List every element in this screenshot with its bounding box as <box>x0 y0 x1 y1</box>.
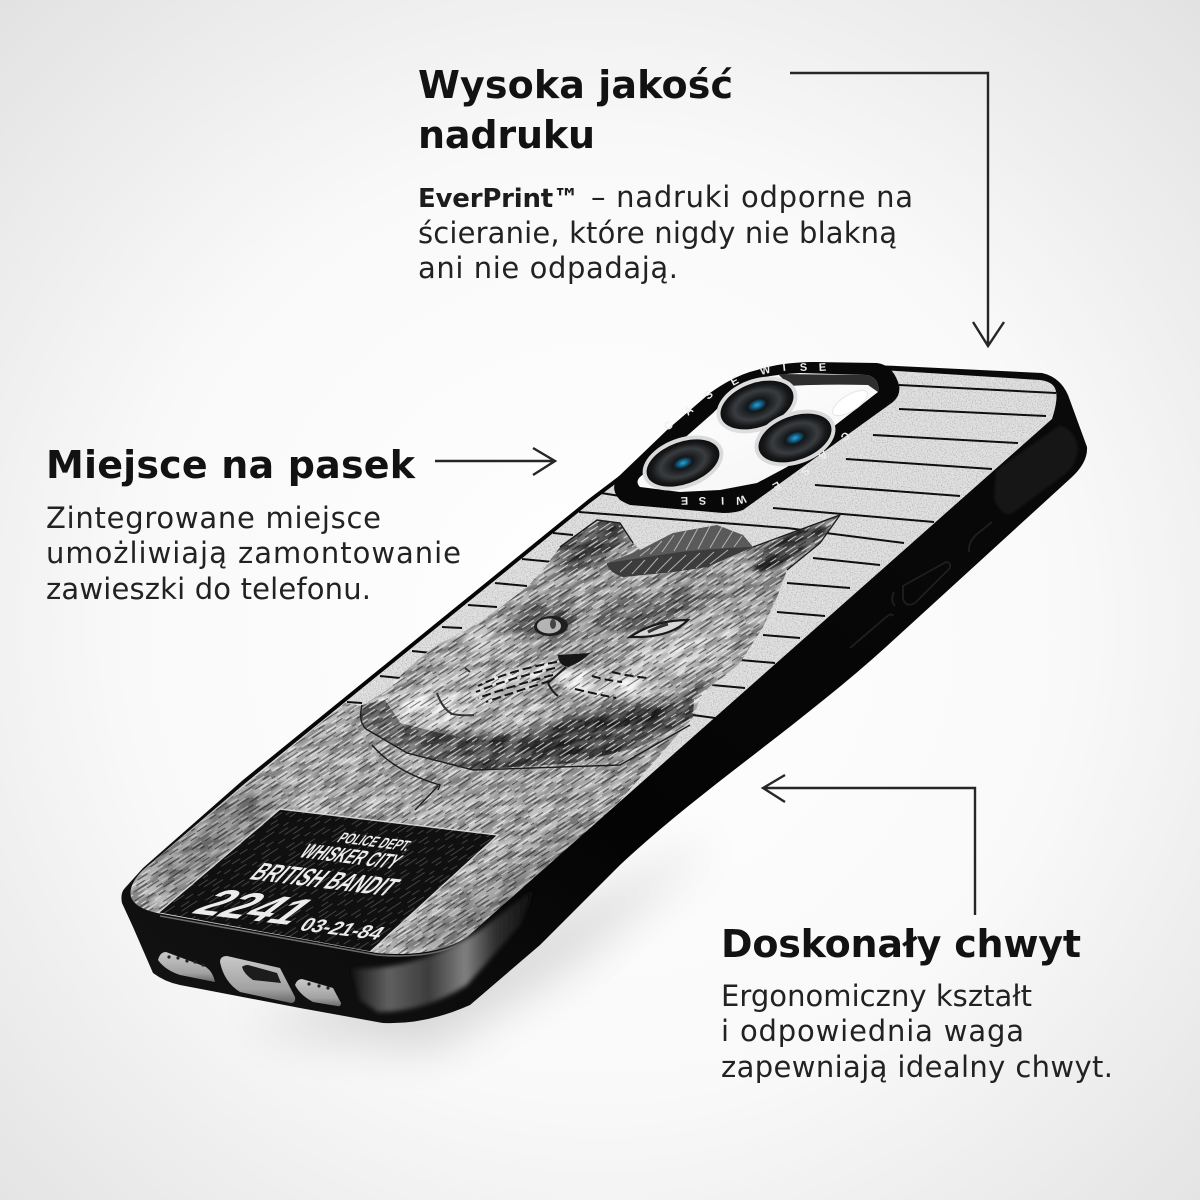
lens right <box>747 399 843 477</box>
speaker right <box>295 979 341 1006</box>
left eye <box>534 616 568 636</box>
plate board <box>158 809 498 952</box>
side bump <box>994 425 1078 515</box>
speaker left <box>158 952 215 982</box>
description: EverPrint™ <box>418 184 579 214</box>
ring lettering bottom: CASEWISE <box>681 429 852 507</box>
plate text: number: 2241 <box>179 882 328 933</box>
callout: print quality <box>418 63 913 285</box>
description: ani nie odpadają. <box>418 251 678 285</box>
description: Zintegrowane miejsce <box>46 501 381 535</box>
arrow: print quality <box>790 73 1004 346</box>
bottom corner reflection <box>352 888 535 1012</box>
hat <box>607 525 753 577</box>
well top shadow <box>778 374 878 392</box>
flash reflection <box>829 386 871 420</box>
description: ścieranie, które nigdy nie blakną <box>418 216 897 250</box>
shadow under phone <box>240 835 720 1050</box>
description: umożliwiają zamontowanie <box>46 536 461 570</box>
heading: nadruku <box>418 113 595 157</box>
phone ports <box>158 952 341 1006</box>
callout: strap slot <box>46 443 461 606</box>
nose and mouth <box>548 653 590 696</box>
camera well <box>638 373 878 492</box>
charging port <box>220 956 295 1003</box>
phone case <box>121 362 1087 1023</box>
description <box>46 501 461 606</box>
right eye <box>630 620 688 637</box>
cat illustration <box>130 514 842 954</box>
ear and collar detail <box>361 515 840 810</box>
cat body <box>130 703 694 958</box>
lens left <box>635 425 731 501</box>
callout: grip <box>721 922 1113 1084</box>
case body <box>121 362 1087 1023</box>
cheek contour <box>437 668 474 715</box>
lens top <box>709 366 805 444</box>
ring lettering top: CASEWISE <box>662 362 826 433</box>
plate text: british bandit: BRITISH BANDIT <box>243 858 407 901</box>
description: – nadruki odporne na <box>591 180 913 214</box>
police plate <box>158 809 498 952</box>
plate text: whisker city: WHISKER CITY <box>294 839 408 873</box>
whiskers <box>476 662 648 702</box>
description: zawieszki do telefonu. <box>46 572 371 606</box>
fine fur hatching <box>130 515 840 958</box>
heading: Miejsce na pasek <box>46 443 416 487</box>
arrow: strap slot <box>435 448 555 475</box>
description: zapewniają idealny chwyt. <box>721 1050 1113 1084</box>
panel grain <box>152 370 1056 863</box>
camera ring <box>614 362 899 513</box>
heading <box>418 63 733 157</box>
sweater collar <box>361 699 694 770</box>
arrow: grip <box>763 775 975 915</box>
bottom lip highlight <box>160 916 470 956</box>
large fur variation <box>130 516 838 954</box>
description: i odpowiednia waga <box>721 1014 1024 1048</box>
heading: Wysoka jakość <box>418 63 733 107</box>
description <box>418 180 913 285</box>
printed back panel <box>130 370 1056 954</box>
plate text: date: 03-21-84 <box>295 914 389 944</box>
plate text: police dept: POLICE DEPT. <box>333 830 415 855</box>
camera module <box>614 362 899 513</box>
body edge shading <box>145 785 600 950</box>
description <box>721 979 1113 1084</box>
plate texture <box>158 809 498 952</box>
side buttons <box>850 522 992 648</box>
head shading <box>390 510 831 754</box>
panel base <box>150 370 1056 864</box>
cat head <box>387 515 840 743</box>
description: Ergonomiczny kształt <box>721 979 1032 1013</box>
heading: Doskonały chwyt <box>721 922 1081 966</box>
mugshot stripes <box>347 385 1056 718</box>
